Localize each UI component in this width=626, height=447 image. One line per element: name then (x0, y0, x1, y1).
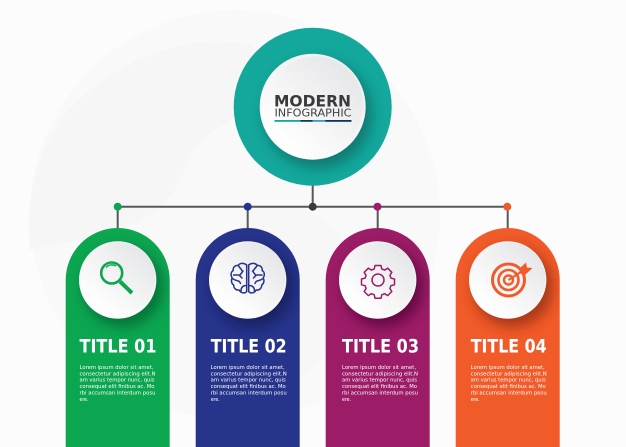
body text: ere. (211, 397, 220, 403)
central hub (234, 28, 392, 186)
connector lines (118, 180, 508, 232)
teal ring (234, 28, 392, 186)
body text: consectetur adipiscing elit.N (211, 371, 287, 377)
heading: INFOGRAPHIC (274, 108, 352, 120)
body text: rbi accumsan interdum posu (211, 390, 287, 396)
title: TITLE 01 (80, 336, 156, 358)
title: TITLE 03 (342, 336, 419, 358)
body text: Lorem ipsum dolor sit amet, (342, 365, 416, 371)
body text: consectetur adipiscing elit.N (80, 371, 156, 377)
heading (274, 92, 352, 120)
icon: brain (231, 263, 264, 293)
body text: ere. (342, 397, 351, 403)
icon disc (79, 241, 156, 319)
icon: magnifier (101, 262, 132, 293)
icon disc (339, 241, 416, 319)
white disc (260, 54, 366, 160)
body text: am varius tempor nunc, quis (211, 378, 286, 384)
body text: consectetur adipiscing elit.N (471, 371, 547, 377)
body text: am varius tempor nunc, quis (80, 378, 155, 384)
title: TITLE 04 (471, 336, 547, 358)
body text: consequat elit finibus ac. Mo (471, 384, 546, 390)
panel: title 01 (66, 228, 170, 447)
body text (80, 365, 156, 403)
icon disc (209, 241, 286, 319)
background globe (29, 10, 440, 420)
panel: title 03 (326, 228, 430, 447)
heading: MODERN (274, 92, 351, 111)
body text: am varius tempor nunc, quis (342, 378, 417, 384)
body text: am varius tempor nunc, quis (471, 378, 546, 384)
body text (211, 365, 287, 403)
body text: consequat elit finibus ac. Mo (80, 384, 154, 390)
body text: Lorem ipsum dolor sit amet, (211, 365, 285, 371)
panel: title 04 (456, 228, 560, 447)
icon: gear (362, 266, 394, 298)
panel: title 02 (196, 228, 300, 447)
icon disc (469, 241, 546, 319)
body text: consequat elit finibus ac. Mo (211, 384, 286, 390)
body text (342, 365, 418, 403)
body text: ere. (471, 397, 480, 403)
body text: Lorem ipsum dolor sit amet, (80, 365, 154, 371)
body text: rbi accumsan interdum posu (342, 390, 418, 396)
infographic (66, 28, 560, 447)
body text: consectetur adipiscing elit.N (342, 371, 418, 377)
body text: Lorem ipsum dolor sit amet, (471, 365, 545, 371)
body text: rbi accumsan interdum posu (471, 390, 547, 396)
connector dots (114, 203, 511, 211)
body text: rbi accumsan interdum posu (80, 390, 156, 396)
body text: consequat elit finibus ac. Mo (342, 384, 417, 390)
body text: ere. (80, 397, 89, 403)
ring shadow (264, 60, 372, 168)
icon: target (492, 262, 532, 296)
body text (471, 365, 547, 403)
title: TITLE 02 (211, 336, 287, 358)
underline bar (274, 120, 352, 122)
